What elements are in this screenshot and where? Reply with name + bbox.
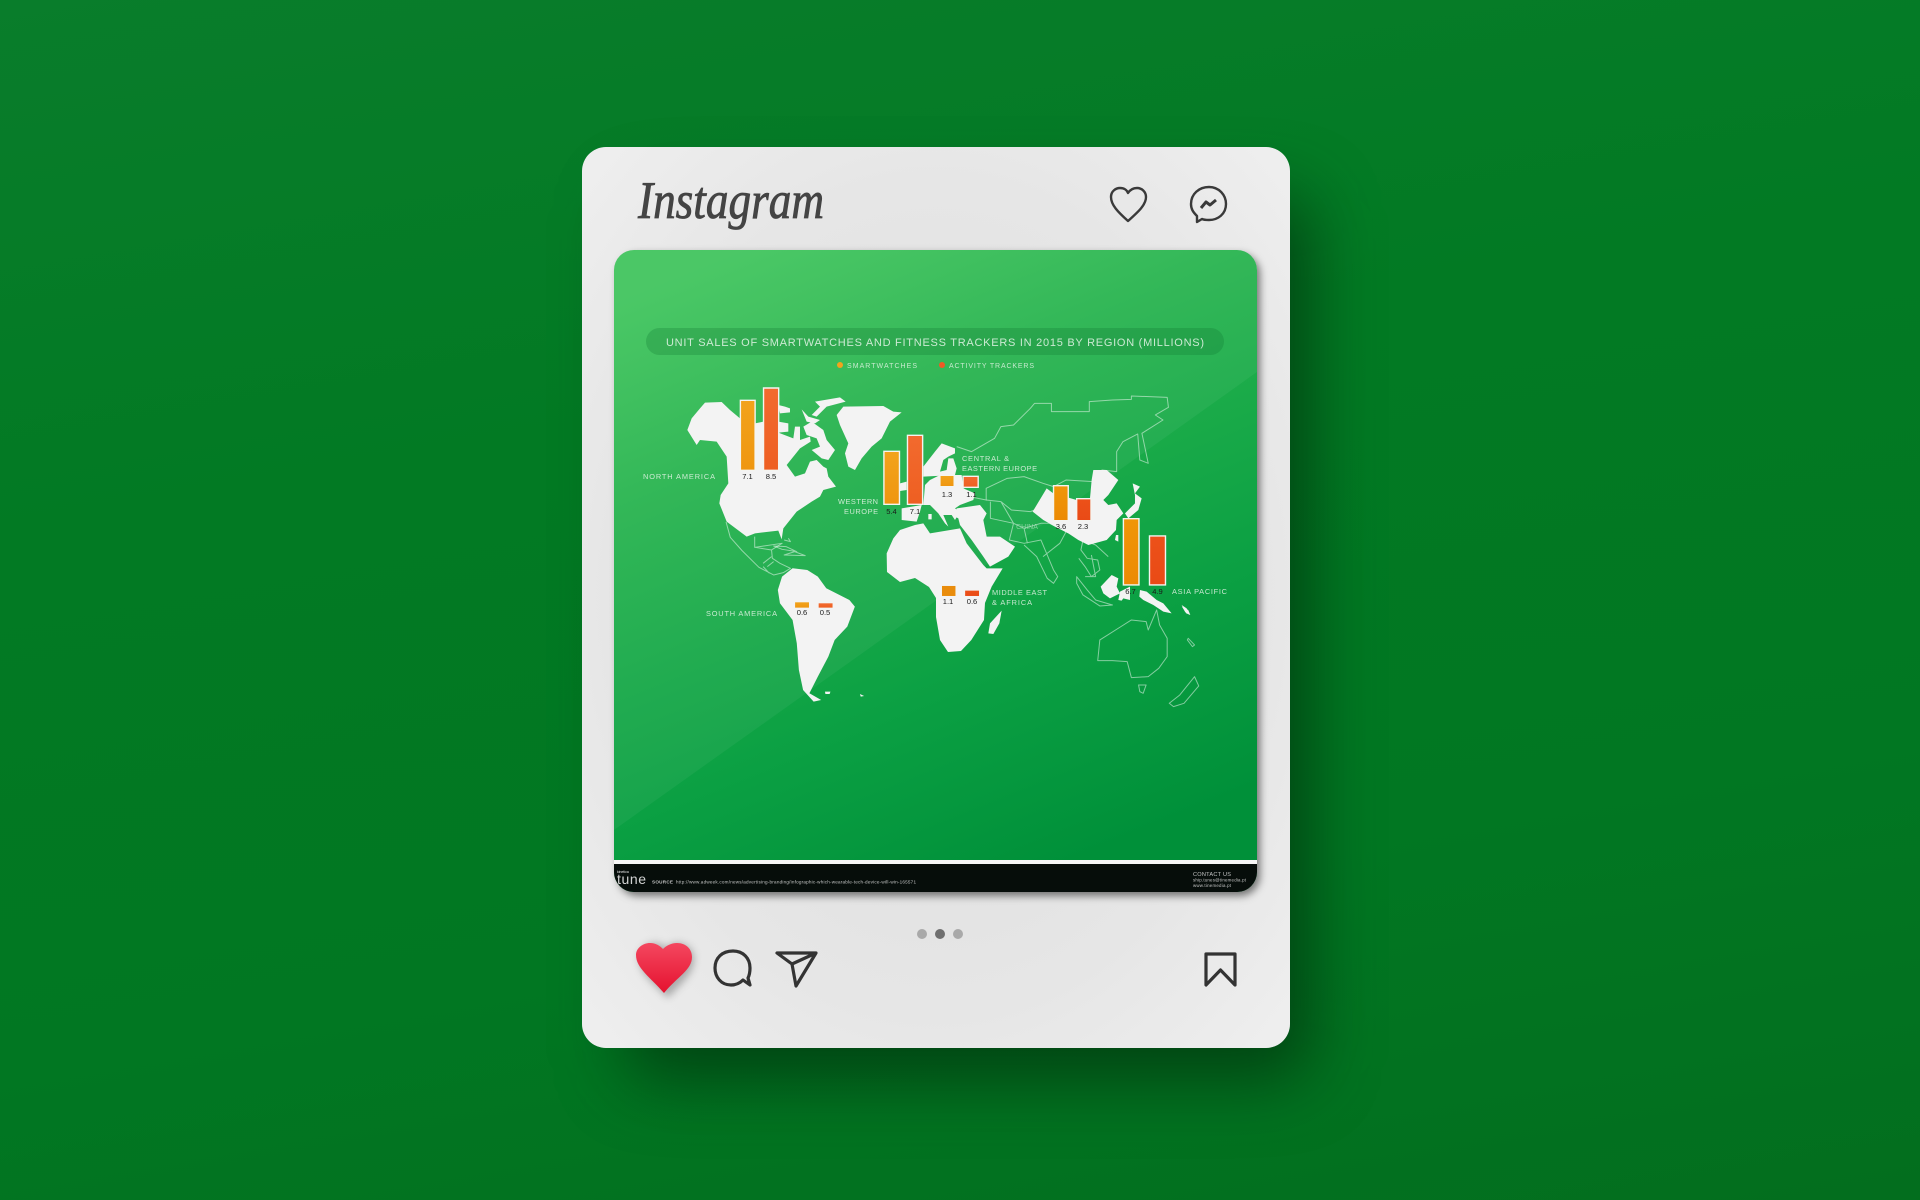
region labels: WESTERN (838, 497, 878, 506)
panel: infographic image (614, 250, 1257, 892)
icon: messenger (1191, 187, 1226, 222)
card shadow (625, 195, 1310, 1080)
footer source: http://www.adweek.com/news/advertising-branding/infographic-which-wearable-tech-device-will-win-165571 (676, 880, 916, 884)
chart: bars (740, 388, 1165, 608)
panel: infographic image shadow (615, 250, 1257, 892)
bar values: 7.1 (910, 507, 920, 516)
legend: ACTIVITY TRACKERS (949, 363, 1034, 370)
carousel dots (917, 929, 963, 939)
bar values: 6.7 (1125, 587, 1136, 596)
region labels: EUROPE (844, 507, 878, 516)
bars: Asia Pacific (1123, 519, 1165, 585)
icon: share arrow (777, 953, 816, 986)
icon: bookmark (1206, 954, 1235, 985)
chart title pill (646, 328, 1224, 355)
region labels: ASIA PACIFIC (1172, 587, 1228, 596)
bars: Western Europe (884, 435, 923, 504)
region labels: EASTERN EUROPE (962, 464, 1037, 473)
bar values: 1.1 (966, 490, 977, 499)
icon: comment (715, 951, 750, 985)
legend: SMARTWATCHES (847, 363, 917, 370)
glare band (614, 250, 1257, 830)
bar values: 0.6 (797, 608, 807, 617)
chart title pill: UNIT SALES OF SMARTWATCHES AND FITNESS TRACKERS IN 2015 BY REGION (MILLIONS) (666, 337, 1204, 349)
region labels: SOUTH AMERICA (706, 609, 777, 618)
footer band (614, 860, 1257, 892)
bar values (742, 472, 1163, 617)
bar values: 7.1 (742, 472, 753, 481)
map: China, Japan, Indonesia, Madagascar (988, 470, 1190, 634)
region labels: CHINA (1016, 524, 1038, 531)
bars: North America (740, 388, 779, 470)
map: North America and Greenland (687, 397, 907, 539)
bar values: 0.5 (820, 608, 830, 617)
footer source: SOURCE (652, 880, 673, 884)
panel: instagram post card (582, 147, 1290, 1048)
bar values: 1.1 (943, 597, 953, 606)
region labels (643, 454, 1228, 618)
bar values: 8.5 (766, 472, 776, 481)
icon: outline heart (1111, 188, 1146, 221)
bar values: 3.6 (1056, 522, 1066, 531)
map: outlined Asia, Oceania and Central America (726, 396, 1199, 707)
bar values: 0.6 (967, 597, 977, 606)
footer contact (1193, 872, 1247, 888)
bar values: 2.3 (1078, 522, 1088, 531)
bar values: 1.3 (942, 490, 952, 499)
bars: South America (795, 602, 833, 608)
bars: Middle East and Africa (942, 586, 979, 596)
region labels: CENTRAL & (962, 454, 1009, 463)
legend (837, 362, 1034, 368)
bar values: 5.4 (886, 507, 897, 516)
title: Instagram logo: Instagram (637, 171, 824, 230)
map: Europe, Africa and Middle East (887, 443, 1015, 652)
region labels: MIDDLE EAST (992, 588, 1047, 597)
footer contact: www.tinemedia.pt (1193, 883, 1232, 888)
footer logo: tune (617, 871, 646, 887)
footer contact: ship.tunes@tinemedia.pt (1193, 878, 1247, 882)
bars: China (1054, 486, 1091, 521)
footer contact: CONTACT US (1193, 872, 1231, 878)
region labels: NORTH AMERICA (643, 472, 715, 481)
bars: Central and Eastern Europe (940, 475, 978, 487)
bar values: 4.9 (1152, 587, 1163, 596)
map: South America (778, 568, 1190, 702)
icon: red like heart (636, 943, 694, 998)
footer logo: kinetica (617, 870, 629, 874)
region labels: & AFRICA (992, 598, 1032, 607)
